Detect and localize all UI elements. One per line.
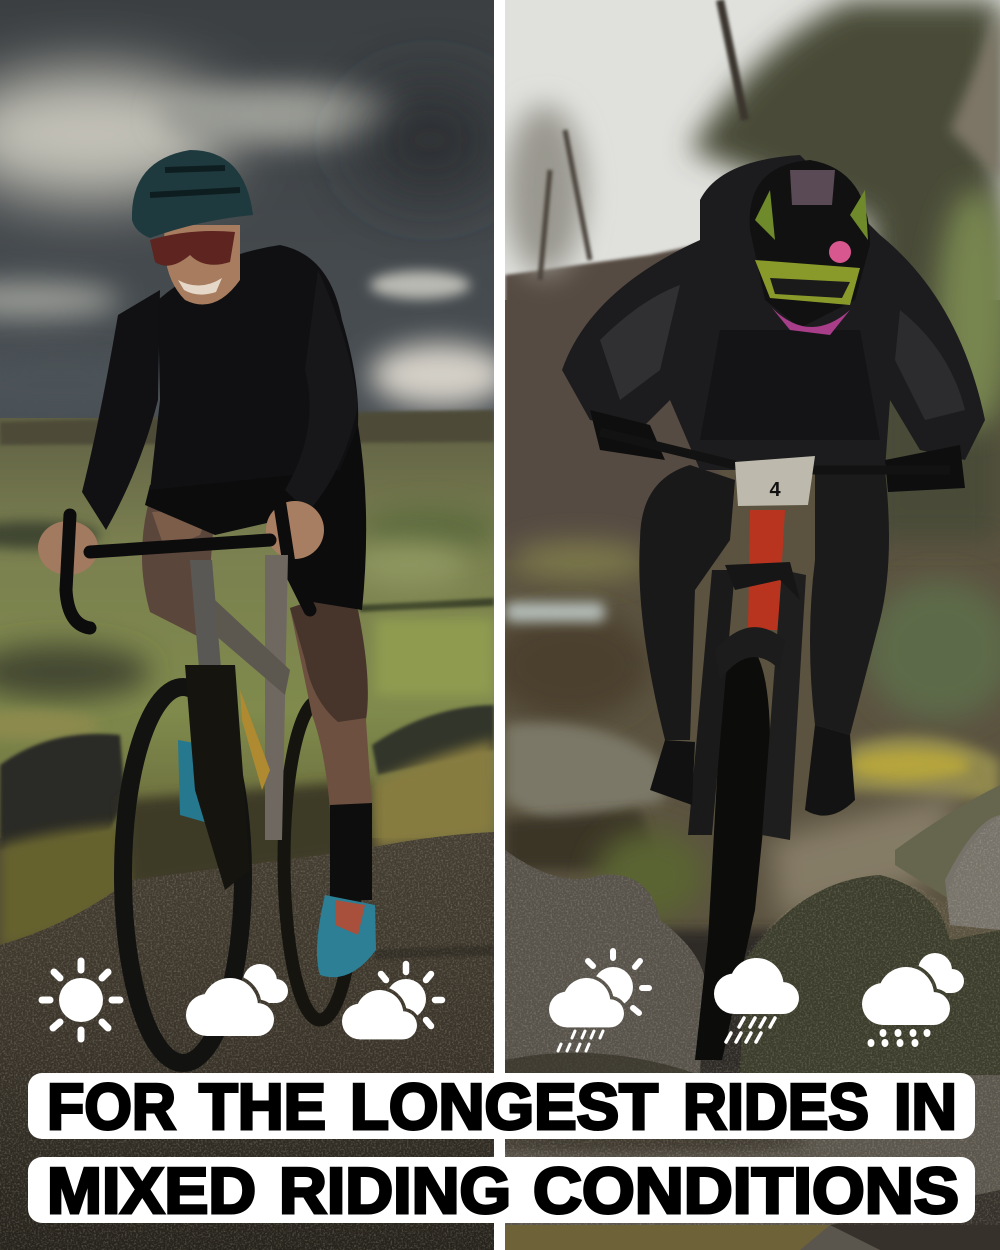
tyre — [695, 640, 770, 1060]
headline banner: line two — [28, 1154, 975, 1227]
mid ground — [490, 542, 1000, 920]
headline banner: line one: IN — [894, 1070, 957, 1143]
icon: sun with light rain — [549, 951, 649, 1051]
jersey arm left — [82, 290, 160, 530]
white divider between photos — [494, 0, 505, 1250]
number board — [735, 456, 815, 506]
panel: rainy mountain bike rider photo — [470, 0, 1000, 1250]
rider right — [562, 155, 985, 1060]
icon: partly sunny — [342, 964, 442, 1039]
bib shorts — [145, 425, 366, 610]
headline banner: line one: FOR — [47, 1070, 176, 1143]
front wheel — [123, 687, 243, 1063]
headline banner: line one — [28, 1070, 975, 1143]
gloves — [590, 410, 665, 460]
forks — [688, 570, 735, 835]
headline banner: line one: THE — [199, 1070, 326, 1143]
jersey — [150, 245, 358, 490]
rider right: 4 — [769, 479, 781, 501]
panel: sunny gravel rider photo — [0, 0, 510, 1250]
head tube and frame — [190, 560, 221, 665]
helmet — [750, 160, 870, 328]
headline banner: line two: CONDITIONS — [533, 1154, 959, 1227]
icon: cloudy — [186, 964, 288, 1036]
icon: rain cloud — [714, 958, 799, 1042]
gravel road — [0, 830, 494, 1250]
headline banner: line two: MIXED — [47, 1154, 256, 1227]
bars — [657, 441, 886, 474]
storm sky — [0, 0, 510, 425]
left leg — [142, 505, 215, 640]
neck and face — [164, 225, 240, 304]
overcast sky — [505, 0, 1000, 300]
red head tube — [748, 510, 785, 630]
icon: showers with second cloud — [862, 953, 964, 1047]
legs — [639, 465, 735, 740]
rider left — [38, 150, 376, 1063]
headline banner: line one: RIDES — [683, 1070, 869, 1143]
helmet — [132, 150, 253, 238]
hands — [38, 521, 98, 575]
rear wheel — [284, 700, 356, 1020]
icon: sun — [42, 961, 120, 1039]
handlebars — [66, 505, 310, 628]
shoes — [650, 740, 695, 805]
headline banner: line one: LONGEST — [350, 1070, 658, 1143]
headline banner: line two: RIDING — [279, 1154, 511, 1227]
stone walls — [0, 705, 494, 850]
right-hand leg — [290, 599, 372, 810]
jersey arm right — [285, 402, 358, 506]
jacket — [562, 155, 985, 470]
blue shoe — [317, 895, 376, 977]
wet rocks — [470, 785, 1000, 1250]
green hills — [0, 410, 500, 838]
grass verges — [0, 740, 494, 950]
woodland background — [505, 0, 1000, 560]
sunglasses — [150, 231, 235, 266]
